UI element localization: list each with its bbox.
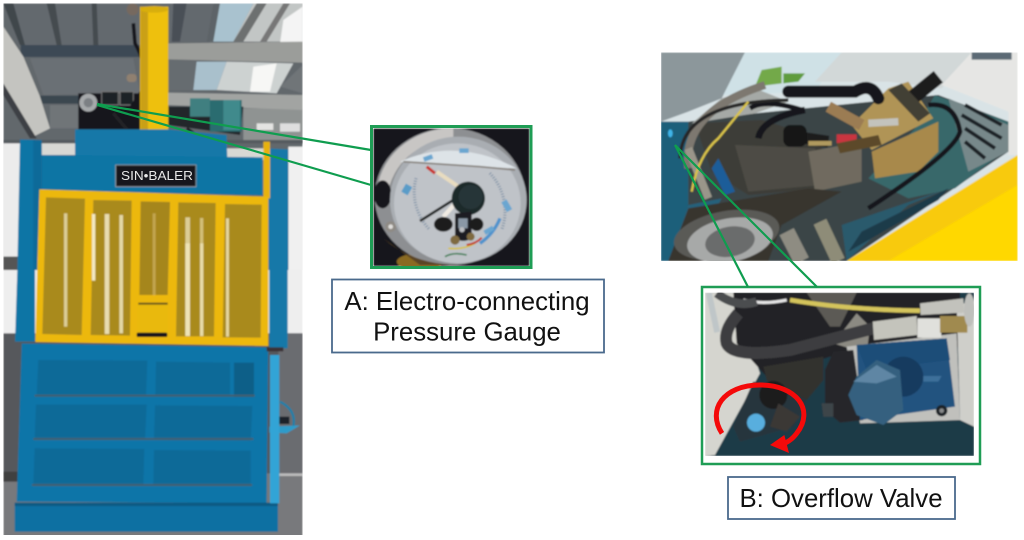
gauge drawing [373, 128, 529, 270]
valve green frame [702, 287, 980, 464]
label B: Overflow Valve [728, 477, 955, 519]
photo: hydraulic unit top view [661, 52, 1018, 269]
photo: vertical baler machine [3, 3, 303, 537]
label A: Electro-connecting Pressure Gauge: Pressure Gauge [373, 318, 561, 346]
machine body drawing [3, 3, 303, 537]
leader lines to gauge [97, 104, 371, 185]
label A: Electro-connecting Pressure Gauge: A: Electro-connecting [344, 288, 590, 316]
label B: Overflow Valve: B: Overflow Valve [739, 485, 943, 513]
inset: pressure gauge photo [372, 126, 531, 270]
valve drawing [705, 292, 975, 456]
logo text: SIN•BALER [121, 168, 193, 183]
lower half, same blur so there is no seam [3, 270, 303, 333]
inset green frame [372, 126, 531, 268]
leader lines to valve [675, 145, 817, 287]
machine mass [668, 95, 1008, 261]
inset: overflow valve photo [702, 287, 980, 464]
icon: red rotation arrow [716, 385, 804, 453]
label A: Electro-connecting Pressure Gauge [332, 280, 604, 352]
